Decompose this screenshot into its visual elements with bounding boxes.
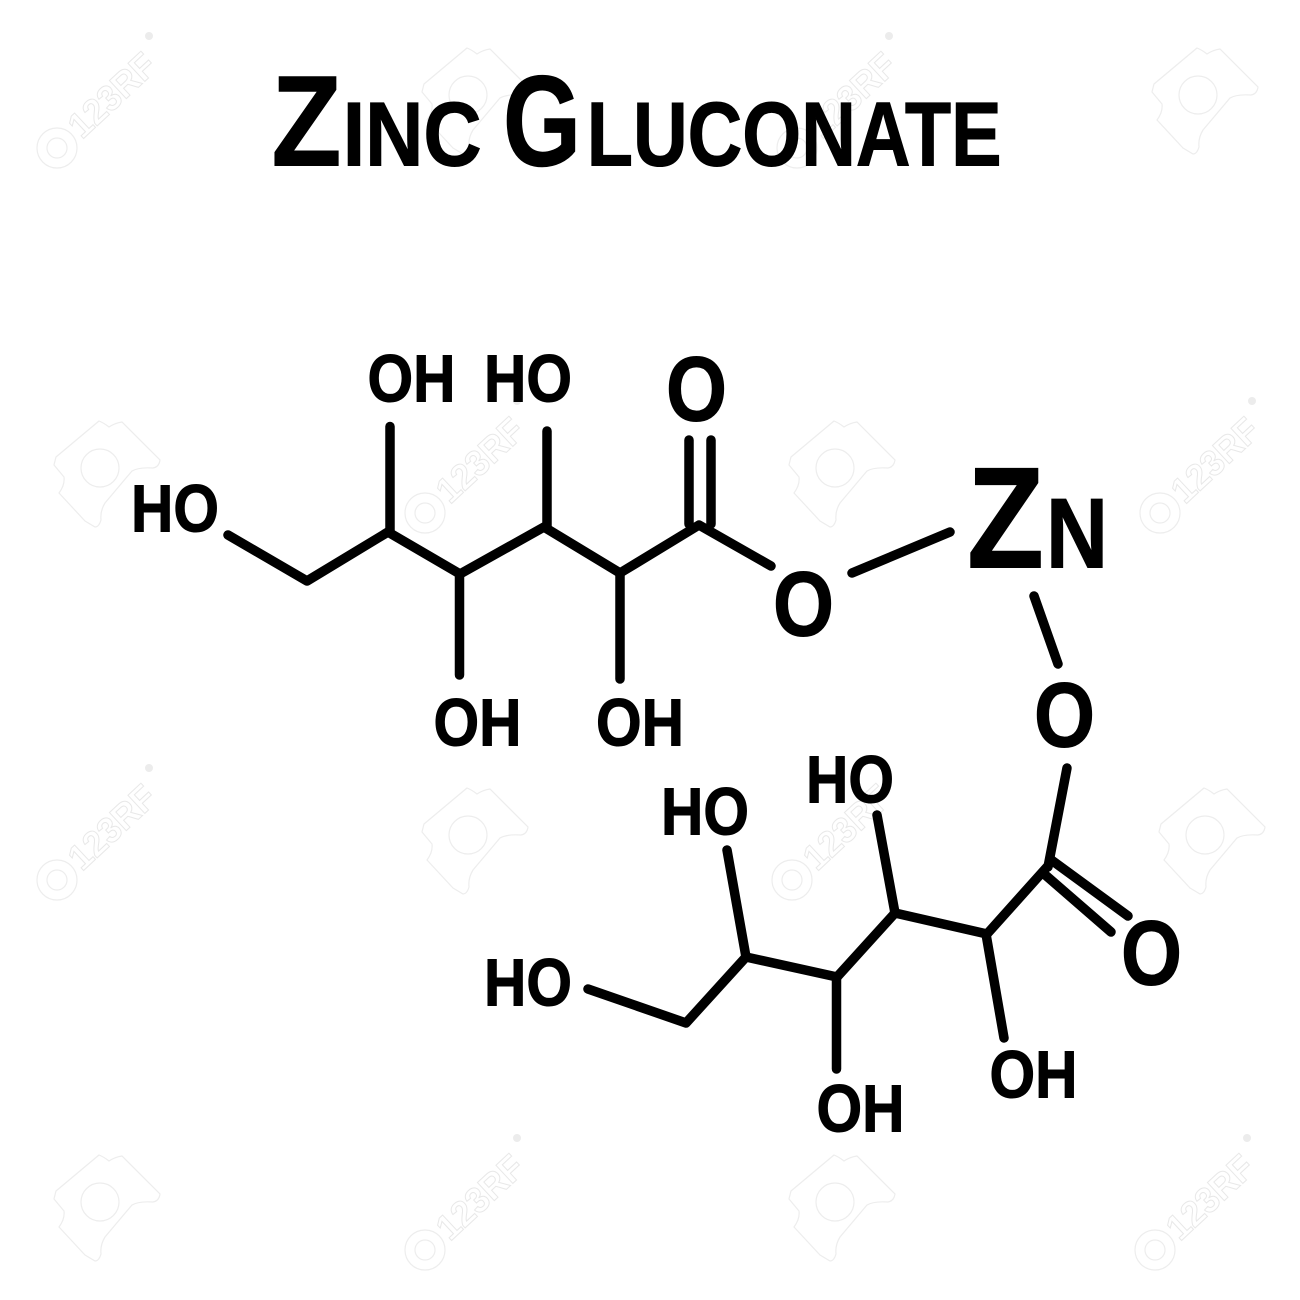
zinc centre: N — [1046, 478, 1108, 588]
lower atom labels: OH — [816, 1072, 904, 1146]
lower atom labels: HO — [661, 774, 749, 850]
upper oxygen labels: O — [773, 554, 834, 656]
title: INC — [343, 84, 482, 186]
faint stock watermark pattern: 123RF — [1157, 1146, 1262, 1248]
faint stock watermark pattern: 123RF — [427, 409, 532, 511]
title: Z — [272, 50, 342, 194]
title — [272, 50, 1002, 194]
linking oxygen: O — [1034, 664, 1095, 766]
faint stock watermark pattern: 123RF — [427, 1146, 532, 1248]
upper carbon skeleton bonds — [228, 426, 771, 679]
upper oxygen labels — [666, 338, 834, 656]
zinc symbol: Z — [967, 438, 1044, 598]
zinc bonds — [852, 532, 1058, 664]
upper gluconate molecule — [131, 338, 834, 760]
title: LUCONATE — [587, 84, 1002, 186]
upper atom labels: OH — [434, 686, 522, 760]
zinc centre — [852, 438, 1108, 766]
lower atom labels: HO — [484, 946, 572, 1020]
faint stock watermark pattern: 123RF — [799, 44, 904, 146]
faint stock watermark pattern: 123RF — [1162, 409, 1267, 511]
upper atom labels: OH — [368, 342, 456, 416]
lower oxygen label: O — [1121, 902, 1182, 1004]
upper atom labels — [131, 342, 684, 760]
faint stock watermark pattern: 123RF — [59, 44, 164, 146]
lower carbon skeleton bonds — [588, 768, 1128, 1069]
upper atom labels: OH — [596, 686, 684, 760]
faint stock watermark pattern: 123RF — [794, 776, 899, 878]
upper oxygen labels: O — [666, 338, 727, 440]
faint stock watermark pattern: 123RF — [59, 776, 164, 878]
lower atom labels: HO — [806, 742, 894, 818]
lower atom labels — [484, 742, 1078, 1146]
title: G — [503, 50, 581, 194]
upper atom labels: HO — [131, 472, 219, 546]
upper atom labels: HO — [484, 342, 572, 416]
lower gluconate molecule — [484, 742, 1182, 1146]
lower atom labels: OH — [990, 1038, 1078, 1112]
